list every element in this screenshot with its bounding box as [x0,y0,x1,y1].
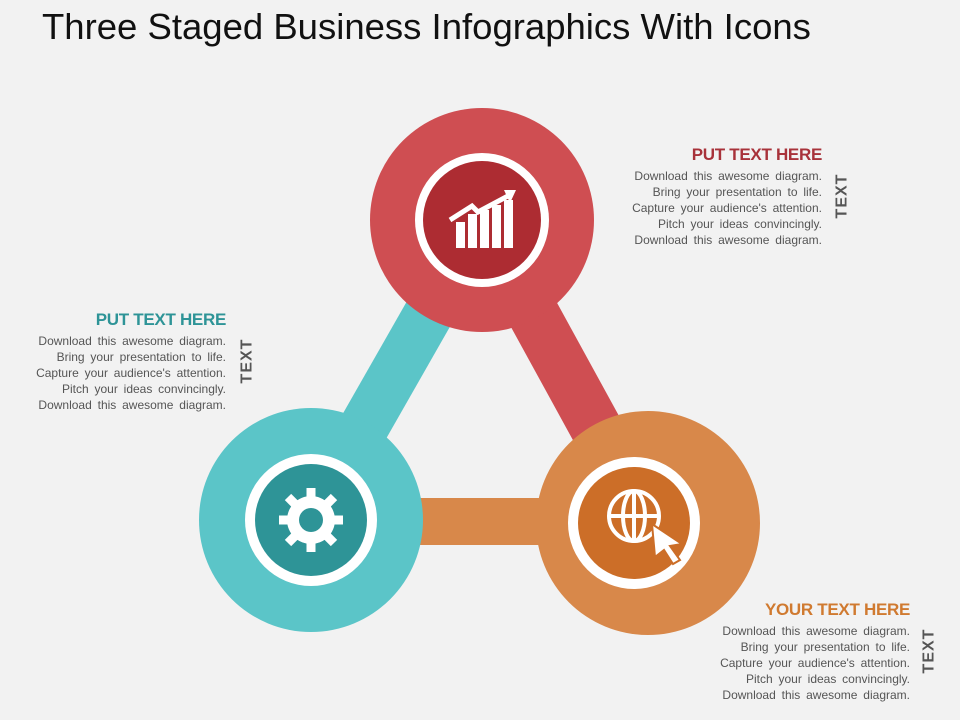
text block: teal: Capture your audience's attention. [36,366,226,380]
text block: teal: Bring your presentation to life. [57,350,226,364]
text block: orange: Capture your audience's attention. [720,656,910,670]
text block: red: Download this awesome diagram. [634,169,822,183]
connector: red [482,220,648,523]
text block: red: Capture your audience's attention. [632,201,822,215]
icon: gear [279,488,343,552]
circle: orange [536,411,760,635]
text block: teal: PUT TEXT HERE [96,310,226,329]
text block: orange: Bring your presentation to life. [741,640,910,654]
text block: teal [36,310,226,412]
text block: teal: Download this awesome diagram. [38,398,226,412]
circle: teal [199,408,423,632]
text block: teal: Pitch your ideas convincingly. [62,382,226,396]
label: teal TEXT: TEXT [238,339,255,383]
title: Three Staged Business Infographics With Icons [42,6,811,47]
text block: red: Download this awesome diagram. [634,233,822,247]
text block: red: Bring your presentation to life. [653,185,822,199]
icon: globe cursor [609,491,659,541]
text block: orange: Download this awesome diagram. [722,624,910,638]
connector: teal [311,220,482,520]
text block: orange: Pitch your ideas convincingly. [746,672,910,686]
text block: orange [720,600,910,702]
connector: orange [311,498,648,545]
text block: red: Pitch your ideas convincingly. [658,217,822,231]
text block: orange: YOUR TEXT HERE [765,600,910,619]
text block: red [632,145,822,247]
text block: red: PUT TEXT HERE [692,145,822,164]
label: red TEXT: TEXT [833,174,850,218]
circle: red [370,108,594,332]
label: orange TEXT: TEXT [920,629,937,673]
icon: chart [450,190,516,248]
text block: orange: Download this awesome diagram. [722,688,910,702]
text block: teal: Download this awesome diagram. [38,334,226,348]
